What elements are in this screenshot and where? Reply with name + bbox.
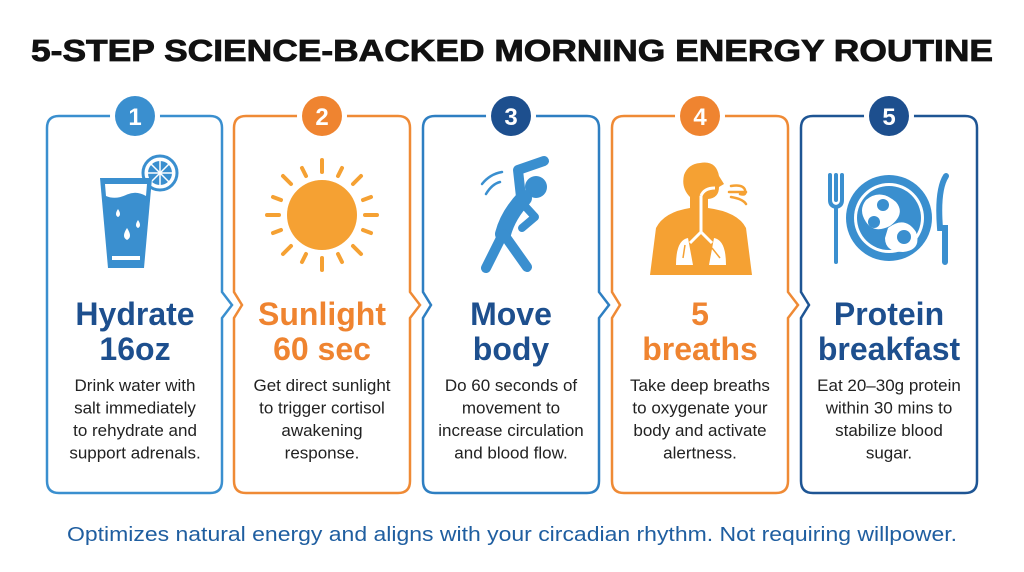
badge 3 [491,96,531,136]
icon: plate with eggs and cutlery [830,175,946,262]
body text: salt immediately [74,398,196,418]
heading: Sunlight [258,296,386,332]
body text: stabilize blood [835,421,943,440]
body text: Do 60 seconds of [445,376,577,395]
badge 3: 3 [504,104,518,131]
heading: breakfast [818,331,960,367]
badge 5: 5 [882,104,896,131]
icon: stretching figure [482,161,547,268]
body text: increase circulation [438,421,584,440]
body text: awakening [281,421,363,440]
badge 5 [869,96,909,136]
heading: Move [470,296,552,332]
heading: body [473,331,549,367]
body text: sugar. [866,444,912,462]
panel: step 5 protein [801,91,977,493]
badge 2: 2 [315,104,329,131]
body text: alertness. [663,444,737,462]
panel: step 1 hydrate [47,91,232,493]
badge 4: 4 [693,104,707,131]
body text: body and activate [633,421,767,440]
heading: Protein [834,296,944,332]
body text: movement to [462,398,560,418]
heading: breaths [642,331,758,367]
body text: to oxygenate your [632,398,768,418]
body text: Get direct sunlight [253,376,391,395]
panel: step 3 move [423,91,609,493]
icon: breathing torso with lungs [650,163,752,275]
body text: and blood flow. [454,444,568,462]
body text: to rehydrate and [73,421,197,440]
body text: Take deep breaths [630,376,770,395]
body text: response. [285,444,359,462]
badge 2 [302,96,342,136]
badge 1 [115,96,155,136]
panel: step 4 breaths [612,91,798,493]
badge 4 [680,96,720,136]
icon: glass of water [100,156,177,268]
heading: 16oz [99,331,171,367]
footer tagline: Optimizes natural energy and aligns with your circadian rhythm. Not requiring willpower. [67,524,957,546]
badge 1: 1 [128,104,142,131]
icon: sun [267,160,377,270]
title: 5-STEP SCIENCE-BACKED MORNING ENERGY ROUTINE [31,33,993,68]
body text: support adrenals. [69,444,201,462]
body text: Drink water with [75,376,195,395]
body text: to trigger cortisol [259,398,385,418]
heading: 5 [691,296,709,332]
panel: step 2 sunlight [234,91,420,493]
body text: within 30 mins to [825,398,952,418]
body text: Eat 20–30g protein [817,376,961,395]
heading: Hydrate [75,296,195,332]
heading: 60 sec [273,331,371,367]
